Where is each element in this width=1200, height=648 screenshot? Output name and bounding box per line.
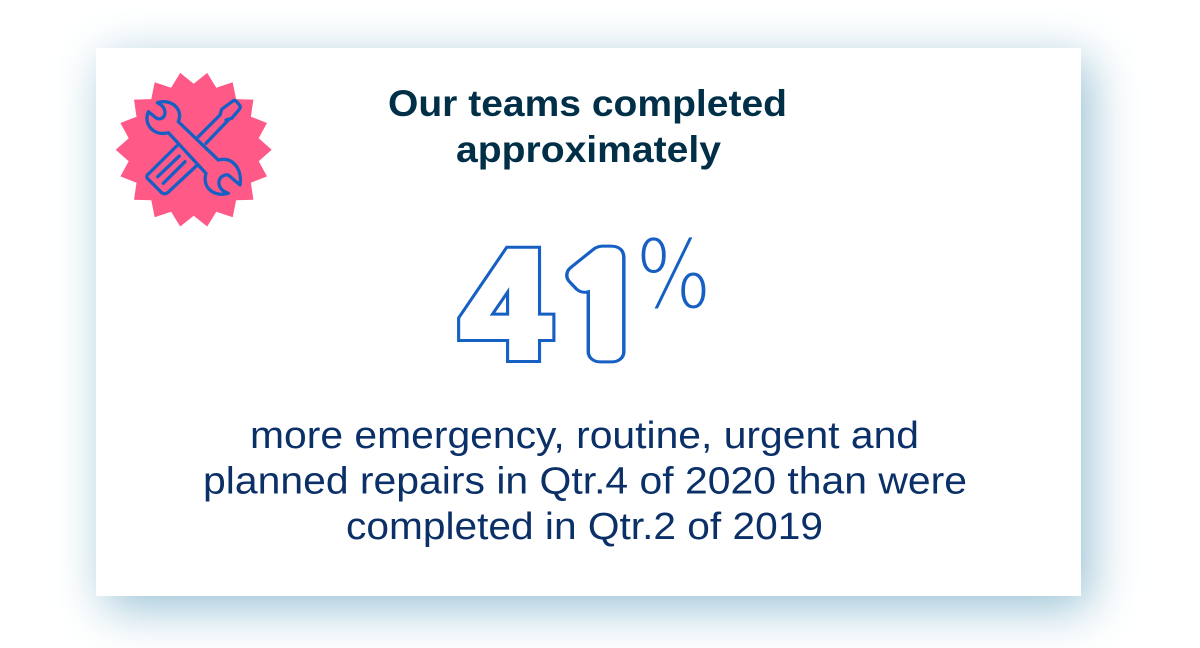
panel: white card with soft blue shadow bbox=[96, 48, 1081, 596]
tools line art bbox=[147, 100, 240, 194]
outlined number 41 bbox=[462, 220, 648, 388]
description text bbox=[203, 415, 967, 548]
outlined number 41: 1 bbox=[557, 243, 648, 372]
heading: approximately bbox=[456, 129, 721, 170]
outlined number 41: 1 bbox=[557, 243, 648, 372]
outlined number 41: 4 bbox=[462, 220, 549, 388]
starburst badge bbox=[116, 73, 272, 226]
heading: Our teams completed bbox=[388, 83, 787, 124]
outlined number 41: 4 bbox=[462, 220, 549, 388]
description text: more emergency, routine, urgent and bbox=[250, 415, 919, 457]
percent sign: % bbox=[636, 218, 711, 332]
big statistic: 41% bbox=[462, 218, 711, 388]
heading bbox=[388, 83, 787, 170]
description text: planned repairs in Qtr.4 of 2020 than were bbox=[203, 460, 967, 502]
description text: completed in Qtr.2 of 2019 bbox=[346, 506, 823, 548]
icon: pink starburst with crossed wrench and screwdriver bbox=[116, 73, 272, 226]
